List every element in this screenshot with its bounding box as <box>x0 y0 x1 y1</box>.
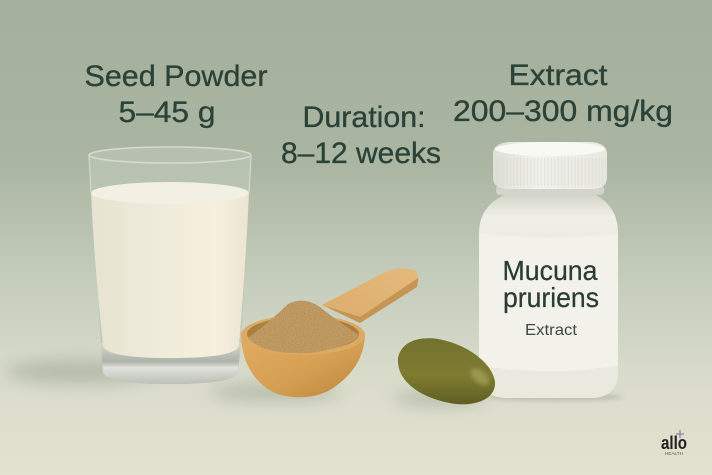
illustration: supplement bottle <box>479 142 623 401</box>
logo: allo health <box>661 430 687 456</box>
bottle label: Extract <box>525 322 578 339</box>
heading: extract dose: Extract <box>508 59 608 92</box>
heading: seed powder dose <box>84 60 268 129</box>
logo: allo health: allo <box>661 433 687 453</box>
bottle label: Mucuna <box>502 255 598 286</box>
heading: extract dose: 200–300 mg/kg <box>453 95 673 128</box>
bottle cap <box>493 142 607 189</box>
heading: duration <box>281 101 441 170</box>
bottle label: pruriens <box>503 282 599 313</box>
illustration: glass of milk <box>5 147 251 384</box>
illustration: green capsule <box>394 338 495 405</box>
milk <box>91 192 249 358</box>
heading: seed powder dose: 5–45 g <box>118 96 216 129</box>
heading: duration: 8–12 weeks <box>281 137 441 170</box>
heading: seed powder dose: Seed Powder <box>84 60 268 93</box>
heading: extract dose <box>453 59 673 128</box>
illustration: wooden scoop with powder <box>210 268 418 400</box>
heading: duration: Duration: <box>302 101 426 134</box>
logo: allo health: HEALTH <box>665 451 683 456</box>
bottle label <box>479 233 618 371</box>
